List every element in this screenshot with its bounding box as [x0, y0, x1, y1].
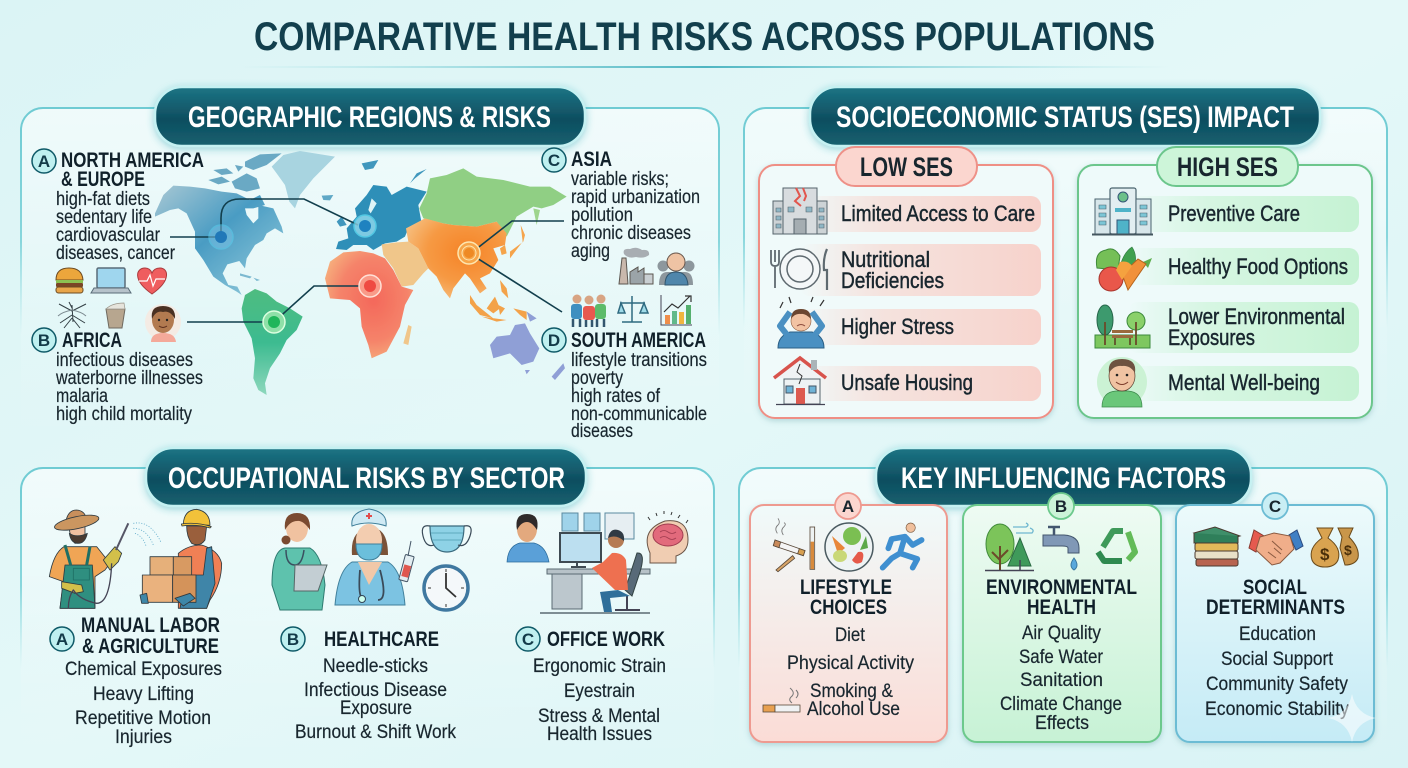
icon: heart with pulse — [138, 268, 167, 294]
region D: south america: high rates of — [571, 386, 661, 407]
icon: park — [1095, 305, 1150, 348]
icon: books — [1194, 527, 1240, 566]
sector C: office work: Health Issues — [547, 724, 652, 745]
connector lines — [170, 199, 564, 322]
icon: stressed person — [778, 297, 824, 348]
region B: africa: waterborne illnesses — [55, 368, 203, 389]
list: lifestyle items: Diet — [835, 625, 866, 646]
region A: north america and europe: diseases, cancer — [56, 243, 176, 264]
list: social items: Education — [1239, 624, 1316, 645]
badge: low SES: LOW SES — [860, 152, 953, 182]
region B: africa: high child mortality — [56, 404, 192, 425]
sector A: manual labor and agriculture — [50, 614, 222, 748]
sector A: manual labor and agriculture: Heavy Lifting — [93, 684, 194, 705]
sector A: manual labor and agriculture: Repetitive Motion — [75, 708, 211, 729]
region B: africa: malaria — [56, 386, 108, 407]
sector A: manual labor and agriculture: MANUAL LABOR — [81, 614, 220, 637]
region D: south america: lifestyle transitions — [571, 350, 707, 371]
row: higher stress — [800, 309, 1041, 345]
panel: low SES — [759, 147, 1053, 418]
badge: low SES — [836, 147, 977, 186]
list: social items: Community Safety — [1206, 674, 1348, 695]
sector B: healthcare: Burnout & Shift Work — [295, 722, 456, 743]
row: nutritional deficiencies — [800, 244, 1041, 296]
heading: occupational risks: OCCUPATIONAL RISKS BY SECTOR — [168, 462, 565, 495]
card C: social determinants — [1176, 493, 1374, 742]
region D: south america: SOUTH AMERICA — [571, 329, 706, 352]
region A: north america and europe — [32, 149, 204, 264]
list: environmental items: Climate Change — [1000, 694, 1122, 715]
region C: asia: pollution — [571, 205, 633, 226]
region A: north america and europe: sedentary life — [56, 207, 152, 228]
icon: recycling arrows — [1098, 531, 1135, 561]
region A: north america and europe: A — [38, 152, 50, 171]
heading: socioeconomic status — [810, 87, 1320, 146]
region A: north america and europe: high-fat diets — [56, 189, 150, 210]
sector B: healthcare: HEALTHCARE — [324, 628, 439, 651]
heading: key influencing factors — [876, 448, 1251, 506]
icon: head with brain — [647, 511, 688, 563]
icon: sparkle watermark — [1328, 694, 1376, 742]
panel: occupational risks by sector — [21, 448, 714, 762]
icon: growth chart — [661, 295, 692, 325]
region C: asia: rapid urbanization — [571, 187, 700, 208]
badge: high SES — [1157, 147, 1298, 186]
title: lifestyle choices: LIFESTYLE — [800, 576, 892, 599]
title: lifestyle choices: CHOICES — [810, 596, 887, 619]
sector C: office work — [516, 627, 666, 745]
icon: nurse with clipboard — [272, 513, 327, 610]
sector B: healthcare: Exposure — [340, 698, 412, 719]
card B: environmental health — [963, 493, 1161, 742]
row: preventive care: Preventive Care — [1168, 201, 1300, 226]
sector B: healthcare — [281, 627, 456, 743]
heading: geographic regions: GEOGRAPHIC REGIONS & RISKS — [188, 101, 551, 134]
region B: africa: AFRICA — [62, 329, 122, 352]
title: social determinants: DETERMINANTS — [1206, 596, 1345, 619]
row: nutritional deficiencies: Nutritional — [841, 247, 930, 272]
heading: geographic regions — [155, 87, 585, 146]
region D: south america: D — [548, 331, 560, 350]
icon: money bags: $ — [1344, 542, 1352, 558]
panel: socioeconomic status impact — [744, 87, 1387, 430]
row: healthy food options — [1128, 248, 1359, 285]
sector C: office work: C — [522, 630, 534, 649]
region C: asia: ASIA — [571, 148, 612, 171]
list: social items: Economic Stability — [1205, 699, 1349, 720]
icon: nurse with mask and syringe — [335, 509, 414, 605]
icon: unsafe house — [774, 358, 826, 404]
badge B — [1048, 493, 1074, 519]
icon: hospital — [1092, 188, 1153, 234]
map marker: africa — [359, 275, 381, 297]
heading: key influencing factors: KEY INFLUENCING FACTORS — [901, 462, 1226, 495]
icon: laptop — [91, 268, 131, 293]
icon: damaged hospital — [773, 188, 827, 234]
title: environmental health — [986, 576, 1137, 619]
icon: factory pollution — [619, 248, 653, 284]
icon: money bags — [1311, 528, 1358, 567]
row: unsafe housing: Unsafe Housing — [841, 370, 973, 395]
badge C: C — [1269, 497, 1281, 516]
region C: asia: chronic diseases — [571, 223, 691, 244]
list: lifestyle items: Physical Activity — [787, 653, 914, 674]
icon: healthy plate — [825, 523, 873, 571]
icon: scales — [618, 296, 648, 322]
row: mental well-being: Mental Well-being — [1168, 370, 1320, 395]
map marker: europe — [354, 215, 376, 237]
map marker: north america — [209, 225, 233, 249]
panel: key influencing factors — [739, 448, 1387, 762]
row: lower environmental exposures — [1128, 302, 1359, 353]
badge A: A — [842, 497, 854, 516]
list: environmental items: Effects — [1035, 713, 1089, 734]
heading: occupational risks — [146, 448, 586, 506]
list: environmental items — [1000, 623, 1122, 734]
title: social determinants — [1206, 576, 1345, 619]
region B: africa: B — [38, 331, 50, 350]
region A: north america and europe: & EUROPE — [61, 168, 145, 191]
region A: north america and europe: NORTH AMERICA — [61, 149, 204, 172]
title: social determinants: SOCIAL — [1243, 576, 1307, 599]
icon: vegetables — [1096, 247, 1152, 291]
icon: child — [145, 304, 181, 342]
sector C: office work: Eyestrain — [564, 681, 635, 702]
region D: south america: poverty — [571, 368, 623, 389]
title: lifestyle choices — [800, 576, 892, 619]
icon: happy person — [1097, 357, 1147, 407]
list: social items: Social Support — [1221, 649, 1334, 670]
sector A: manual labor and agriculture: & AGRICULTURE — [82, 635, 219, 658]
list: lifestyle items — [787, 625, 914, 720]
title: COMPARATIVE HEALTH RISKS ACROSS POPULATIONS — [254, 15, 1155, 59]
sector C: office work: OFFICE WORK — [547, 628, 665, 651]
region C: asia — [542, 148, 700, 262]
row: healthy food options: Healthy Food Options — [1168, 254, 1348, 279]
sector B: healthcare: Infectious Disease — [304, 680, 447, 701]
title: environmental health: HEALTH — [1027, 596, 1096, 619]
sector A: manual labor and agriculture: A — [56, 630, 68, 649]
region B: africa — [32, 328, 203, 425]
icon: face mask — [422, 526, 471, 552]
list: environmental items: Sanitation — [1020, 670, 1103, 691]
row: mental well-being — [1128, 366, 1359, 401]
region C: asia: variable risks; — [571, 169, 669, 190]
icon: group of people — [571, 294, 606, 327]
list: lifestyle items: Smoking & — [810, 681, 893, 702]
row: preventive care — [1128, 196, 1359, 232]
row: limited access to care: Limited Access to Care — [841, 201, 1035, 226]
sector B: healthcare: B — [287, 630, 299, 649]
title: environmental health: ENVIRONMENTAL — [986, 576, 1137, 599]
region C: asia: aging — [571, 241, 610, 262]
icon: burger — [56, 268, 83, 293]
sector C: office work: Ergonomic Strain — [533, 656, 666, 677]
row: nutritional deficiencies: Deficiencies — [841, 268, 944, 293]
icon: cigarette and alcohol — [773, 518, 815, 572]
list: social items — [1205, 624, 1349, 720]
icon: office worker at desk — [507, 513, 650, 613]
region D: south america: diseases — [571, 421, 633, 442]
card A: lifestyle choices — [750, 493, 947, 742]
icon: handshake — [1249, 530, 1303, 565]
sector B: healthcare: Needle-sticks — [323, 656, 428, 677]
icon: dirty water cup — [106, 303, 125, 328]
list: environmental items: Safe Water — [1019, 647, 1104, 668]
icon: faucet and droplet — [1043, 527, 1079, 570]
region D: south america — [542, 328, 707, 442]
region D: south america: non-communicable — [571, 404, 707, 425]
row: unsafe housing — [800, 366, 1041, 401]
list: lifestyle items: Alcohol Use — [807, 699, 900, 720]
icon: trees and wind — [985, 523, 1034, 570]
panel: geographic regions and risks — [21, 87, 719, 442]
sector C: office work: Stress & Mental — [538, 706, 660, 727]
row: limited access to care — [800, 196, 1041, 232]
row: lower environmental exposures: Exposures — [1168, 325, 1255, 350]
world map — [155, 151, 567, 395]
icon: empty plate — [771, 249, 827, 290]
badge C — [1262, 493, 1288, 519]
region A: north america and europe: cardiovascular — [56, 225, 161, 246]
sector A: manual labor and agriculture: Chemical Exposures — [65, 659, 222, 680]
sector A: manual labor and agriculture: Injuries — [115, 727, 172, 748]
icon: warehouse worker with boxes — [140, 509, 222, 608]
badge A — [835, 493, 861, 519]
badge B: B — [1055, 497, 1067, 516]
icon: small cigarette — [763, 688, 800, 712]
panel: high SES — [1078, 147, 1372, 418]
row: higher stress: Higher Stress — [841, 314, 954, 339]
row: lower environmental exposures: Lower Environmental — [1168, 304, 1345, 329]
icon: elderly people — [658, 253, 694, 285]
region C: asia: C — [548, 151, 560, 170]
icon: clock — [424, 566, 468, 610]
region B: africa: infectious diseases — [56, 350, 193, 371]
map marker: asia — [458, 242, 480, 264]
icon: farmer with sprayer — [49, 510, 161, 608]
list: environmental items: Air Quality — [1022, 623, 1101, 644]
icon: money bags: $ — [1320, 545, 1330, 564]
badge: high SES: HIGH SES — [1177, 152, 1278, 182]
map marker: south america — [263, 311, 285, 333]
icon: runner — [883, 523, 922, 568]
icon: mosquito — [58, 302, 86, 328]
